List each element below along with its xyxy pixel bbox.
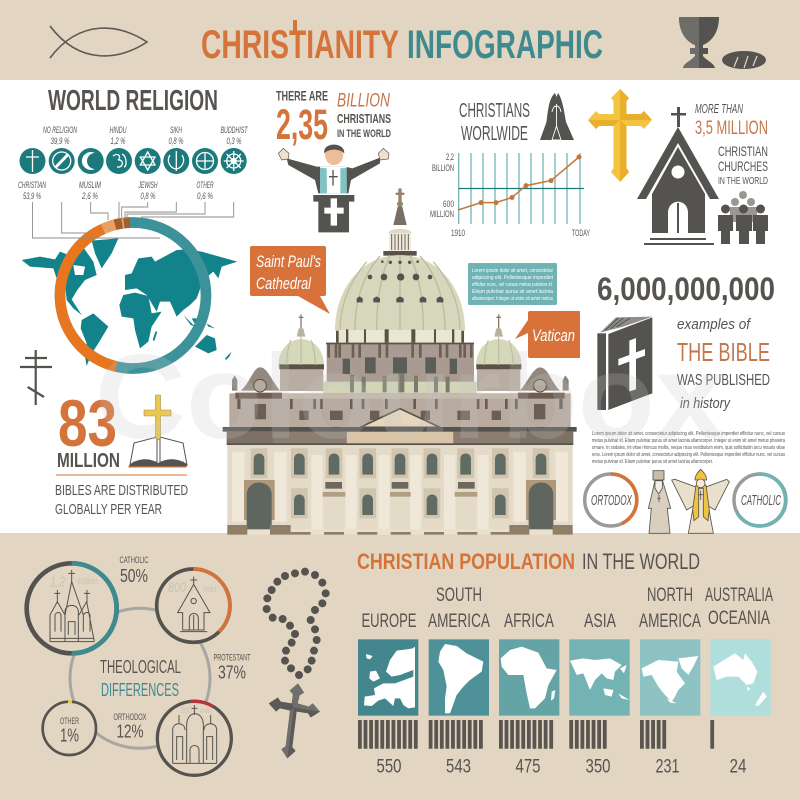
diagram labels: 1% — [60, 726, 79, 746]
line chart: christians over time: 2,2 — [446, 152, 454, 163]
stat: 6 billion bibles: 6,000,000,000 — [597, 271, 775, 307]
callout: saint paul's cathedral: Saint Paul's — [256, 252, 321, 271]
figure: catholic pope — [672, 469, 729, 533]
diagram labels: ORTHODOX — [114, 712, 147, 723]
stat: 2,35 billion christians: THERE ARE — [276, 88, 328, 104]
tile: australia — [710, 639, 771, 716]
tile: europe — [358, 639, 418, 716]
badge: ortodox — [585, 474, 637, 526]
icon: rosary — [263, 568, 330, 758]
text box: lorem note: efficitur nunc, vel cursus metus pulvinar id. — [472, 282, 553, 288]
religion labels: 0,6 % — [197, 191, 213, 202]
text box: lorem note: adipiscing elit. Pellentesque imperdiet — [472, 275, 554, 281]
callout: saint paul's cathedral: Cathedral — [256, 274, 312, 293]
title — [201, 20, 603, 67]
connector lines — [32, 202, 234, 238]
dome drum — [326, 343, 474, 384]
callout: vatican: Vatican — [532, 326, 575, 345]
population numbers: 350 — [586, 756, 610, 778]
theological differences diagram — [27, 555, 251, 775]
stat: 3,5 million churches: CHURCHES — [718, 158, 768, 174]
diagram labels: 37% — [218, 662, 246, 682]
diagram labels: 300 — [180, 705, 192, 715]
stat: 2,35 billion christians: IN THE WORLD — [337, 128, 391, 140]
population numbers: 550 — [376, 756, 402, 778]
header band — [0, 0, 800, 80]
circle: other — [43, 702, 96, 755]
text box: lorem note — [468, 263, 557, 305]
terrace with statues — [232, 367, 569, 394]
diagram labels — [50, 555, 251, 746]
main dome — [335, 255, 465, 343]
stat: 6 billion bibles: examples of — [677, 316, 752, 333]
callout: vatican — [515, 311, 580, 358]
line chart: christians over time: TODAY — [572, 228, 590, 239]
tile: south america — [429, 639, 489, 716]
heading: theological differences: DIFFERENCES — [101, 680, 179, 700]
religion labels: CHRISTIAN — [18, 180, 46, 191]
heading: theological differences: THEOLOGICAL — [100, 657, 181, 677]
religion icons row — [20, 148, 247, 174]
line chart: christians over time: 600 — [443, 199, 454, 210]
icon: ichthys fish — [50, 26, 147, 58]
icon: church — [637, 107, 719, 245]
stat: 83 million — [55, 386, 188, 518]
religion labels: 0,8 % — [140, 191, 156, 202]
religion labels: MUSLIM — [79, 180, 101, 191]
badge: catholic — [734, 474, 786, 526]
heading: christians worldwide: CHRISTIANS — [459, 100, 530, 122]
stat: 83 million: 83 — [58, 386, 117, 460]
callout: saint paul's cathedral — [250, 246, 330, 314]
icon: orthodox cross — [20, 350, 52, 405]
circle: protestant church — [157, 569, 230, 642]
diagram labels: billion — [78, 576, 98, 586]
line chart: christians over time: 1910 — [451, 228, 465, 239]
stat: 3,5 million churches: 3,5 MILLION — [695, 118, 768, 139]
bottom panel background — [0, 533, 800, 800]
religion labels: BUDDHIST — [220, 125, 248, 136]
circle: catholic church — [27, 563, 117, 653]
text: Colourbox — [95, 330, 725, 464]
population numbers: 24 — [730, 756, 747, 778]
religion labels: 0,3 % — [226, 136, 242, 147]
religion labels: 2,6 % — [81, 191, 98, 202]
stat: 2,35 billion christians: BILLION — [337, 90, 390, 112]
lorem paragraph — [592, 431, 785, 465]
region names: AMERICA — [428, 611, 490, 632]
icon: bible book — [597, 317, 652, 410]
icon: praying hands — [540, 93, 574, 140]
donut chart: religion shares — [60, 222, 206, 368]
diagram labels: 800 — [168, 579, 186, 595]
population numbers: 475 — [516, 756, 540, 778]
region map tiles — [358, 639, 771, 716]
stat: 3,5 million churches — [695, 101, 768, 187]
text box: lorem note: Etiam pulvinar purus sit amet lacinia — [472, 289, 553, 295]
stat: 2,35 billion christians — [276, 88, 391, 149]
stat: 6 billion bibles: in history — [680, 395, 731, 412]
tile: north america — [640, 639, 700, 716]
attic storey — [229, 393, 571, 428]
cathedral illustration — [223, 188, 577, 535]
circle: orthodox church — [157, 701, 231, 775]
religion labels: SIKH — [170, 125, 182, 136]
region names — [362, 585, 773, 632]
heading: christian population: CHRISTIAN POPULATION — [357, 549, 575, 574]
religion labels: 1,2 % — [110, 136, 126, 147]
icon: chalice — [679, 17, 719, 68]
stat: 2,35 billion christians: 2,35 — [276, 101, 328, 149]
icon: bread — [722, 51, 766, 69]
religion labels: 0,8 % — [168, 136, 184, 147]
side domes — [278, 314, 522, 391]
heading: world religion: WORLD RELIGION — [48, 85, 218, 117]
religion labels: NO RELIGION — [43, 125, 77, 136]
religion labels: HINDU — [110, 125, 127, 136]
line chart: christians over time: BILLION — [432, 163, 454, 174]
population numbers — [376, 756, 747, 778]
badge: ortodox: ORTODOX — [591, 492, 633, 509]
icon: open bible with gold cross — [128, 395, 187, 468]
religion labels: JEWISH — [138, 180, 158, 191]
text box: lorem note: Lorem ipsum dolor sit amet, consectetur — [472, 268, 553, 274]
religion labels: OTHER — [196, 180, 214, 191]
title: CHRISTIANITY — [201, 23, 399, 67]
stat: 83 million: BIBLES ARE DISTRIBUTED — [55, 482, 188, 499]
diagram labels: OTHER — [60, 716, 79, 727]
line chart: christians over time: MILLION — [430, 209, 454, 220]
lorem paragraph: metus pulvinar id. Etiam pulvinar purus sit amet lacinia ullamcorper. — [592, 459, 713, 465]
population numbers: 231 — [656, 756, 680, 778]
stat: 3,5 million churches: IN THE WORLD — [718, 175, 768, 187]
text box: lorem note: ullamcorper. Integer ut enim sit amet metus — [472, 296, 553, 302]
diagram labels: PROTESTANT — [214, 652, 251, 664]
heading: christians worldwide: WORLWIDE — [461, 123, 528, 145]
diagram labels: mln — [200, 708, 212, 715]
tile: africa — [499, 639, 559, 716]
population tally bars — [358, 720, 714, 749]
region names: NORTH — [647, 585, 693, 606]
diagram labels: 1,2 — [50, 574, 65, 590]
title: INFOGRAPHIC — [407, 23, 603, 67]
icon: congregation — [718, 191, 768, 244]
heading: christian population: IN THE WORLD — [582, 549, 700, 574]
heading: theological differences — [100, 657, 181, 700]
diagram labels: 12% — [116, 722, 144, 742]
region names: AFRICA — [504, 611, 554, 632]
stat: 83 million: GLOBALLY PER YEAR — [55, 501, 162, 518]
religion labels — [18, 125, 248, 202]
main dome lantern — [383, 188, 417, 256]
diagram labels: 50% — [120, 566, 148, 586]
stat: 3,5 million churches: CHRISTIAN — [718, 143, 768, 159]
tile: asia — [569, 639, 630, 716]
pediment and entablature — [223, 409, 577, 445]
heading: christians worldwide — [459, 100, 530, 145]
region names: AMERICA — [639, 611, 701, 632]
religion labels: 53,9 % — [23, 191, 41, 202]
stat: 6 billion bibles — [597, 271, 775, 412]
icon: golden cross — [588, 89, 652, 182]
world map — [22, 238, 237, 366]
stat: 2,35 billion christians: CHRISTIANS — [337, 112, 391, 126]
figure: orthodox priest — [648, 471, 671, 533]
stat: 83 million: MILLION — [57, 450, 120, 472]
region names: EUROPE — [362, 611, 416, 632]
population numbers: 543 — [446, 756, 471, 778]
region names: SOUTH — [436, 585, 482, 606]
line chart: christians over time — [430, 152, 590, 239]
lower facade — [227, 445, 573, 535]
icon: preacher at lectern — [278, 145, 389, 232]
religion labels: 39,9 % — [50, 136, 70, 147]
region names: ASIA — [584, 611, 616, 632]
diagram labels: CATHOLIC — [120, 555, 149, 566]
region names: OCEANIA — [708, 608, 770, 629]
stat: 3,5 million churches: MORE THAN — [695, 101, 743, 116]
diagram labels: mln — [204, 584, 216, 594]
